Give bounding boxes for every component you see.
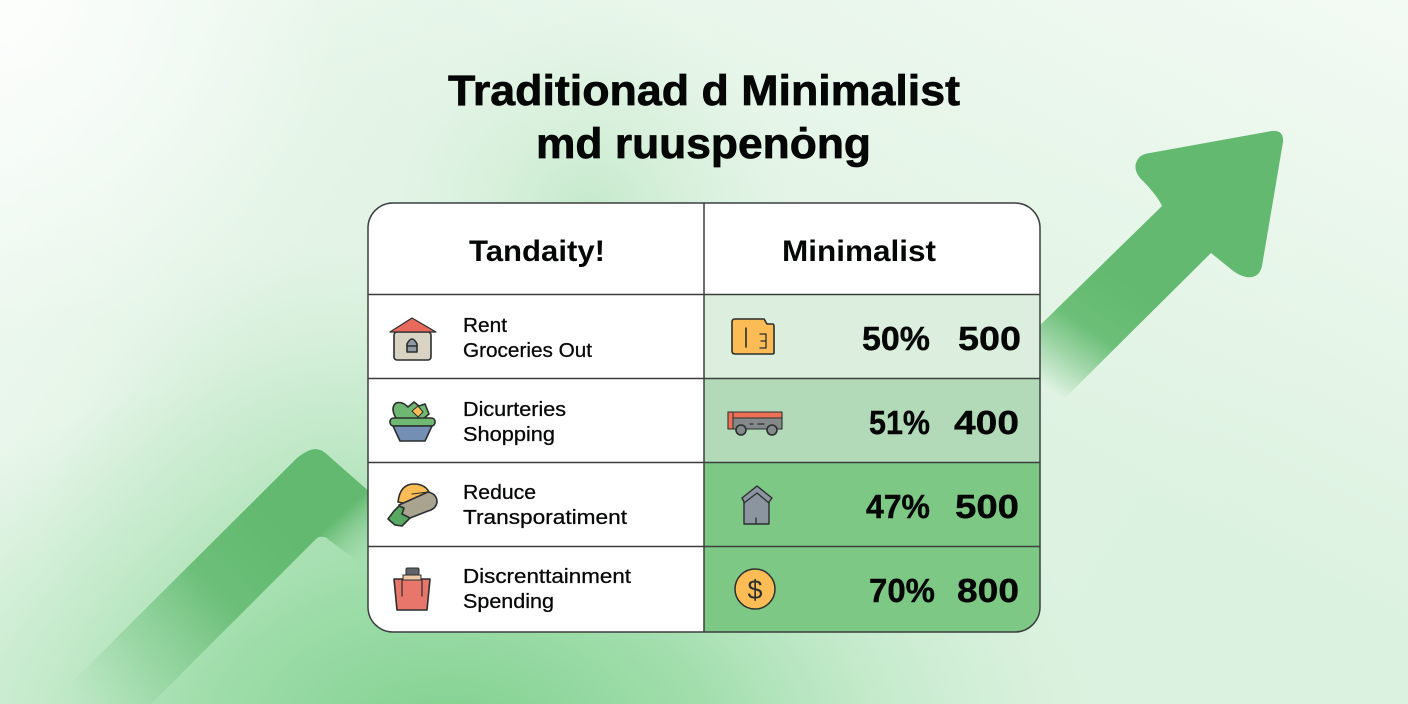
icon: house [390,318,436,360]
row 2 values: 51% [869,404,930,441]
icon: building [742,486,772,524]
row 1 values [862,320,1021,357]
row 2 labels: Dicurteries [463,399,566,421]
arrow: rising left trend line [50,449,372,704]
row 4 values: 800 [957,572,1019,609]
row 3 values: 47% [866,488,930,525]
title: Traditionad d Minimalist [448,67,960,115]
row 4 labels: Discrenttainment [463,566,631,588]
table grid lines [368,203,1040,632]
minimalist column shaded cells [704,294,1040,632]
row 4 labels [463,566,631,613]
row 2 values [869,404,1019,441]
icon: cart truck [728,412,782,435]
comparison table [368,203,1040,632]
row 1 labels: Rent [463,315,507,337]
arrow: large upward arrow at right [1030,131,1283,430]
row 3 values: 500 [955,488,1019,525]
row 4 values: 70% [869,572,935,609]
row 2 values: 400 [954,404,1019,441]
icon: hand with hat [388,484,437,526]
row 3 values [866,488,1019,525]
row 3 labels [463,482,627,529]
title: md ruuspenȯng [536,120,871,168]
header: minimalist: Minimalist [782,235,936,268]
icon: folder card [732,319,774,354]
icon: shopping bag [394,568,430,610]
row 3 labels: Transporatiment [463,507,627,529]
table background [368,203,1040,632]
row 3 labels: Reduce [463,482,536,504]
row 2 labels: Shopping [463,424,555,446]
row 4 labels: Spending [463,591,554,613]
icon: salad bowl [390,402,435,441]
row 1 labels: Groceries Out [463,340,592,362]
row 1 labels [463,315,592,362]
icon: dollar coin: $ [747,575,763,605]
row 2 labels [463,399,566,446]
row 1 values: 50% [862,320,930,357]
header: traditional: Tandaity! [469,235,605,268]
title [448,67,960,168]
row 1 values: 500 [958,320,1021,357]
icon: dollar coin [735,569,775,609]
row 4 values [869,572,1019,609]
